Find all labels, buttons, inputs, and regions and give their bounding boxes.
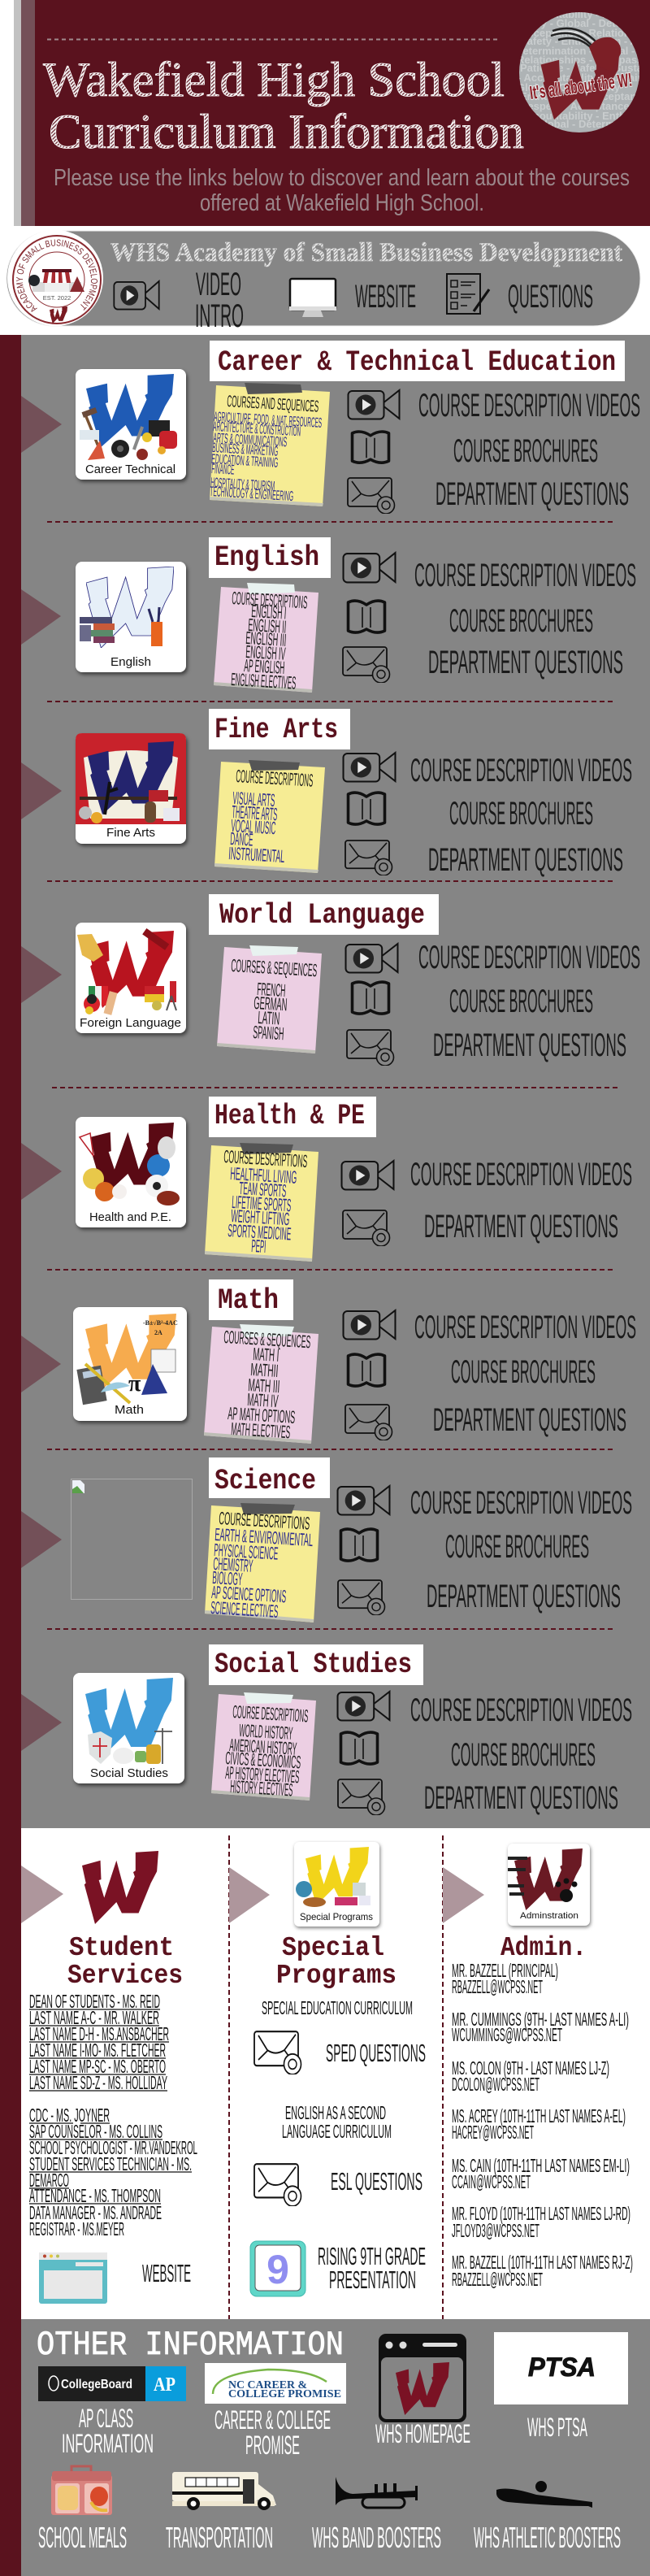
- sticky note: MATH IV: [247, 1389, 279, 1411]
- panel: support services background: [21, 1828, 650, 2319]
- icon: monitor: [289, 279, 336, 317]
- logo: college board ap: [38, 2366, 186, 2401]
- link: course description videos: [338, 1692, 632, 1728]
- sticky note: HOSPITALITY & TOURISM: [210, 475, 275, 494]
- arrow: [21, 396, 62, 453]
- sticky note: SCIENCE ELECTIVES: [210, 1597, 279, 1622]
- sticky note: AP SCIENCE OPTIONS: [211, 1582, 287, 1606]
- panel: math: COURSES & SEQUENCES: [223, 1327, 311, 1352]
- panel: social studies: [21, 1644, 632, 1816]
- panel: special programs: [229, 1842, 426, 2296]
- sticky note: DANCE: [230, 828, 254, 850]
- icon: health card: Health and P.E.: [89, 1210, 171, 1224]
- icon: rising 9th grade: 9: [266, 2247, 289, 2292]
- ap class information label: [62, 2404, 154, 2458]
- sticky note: [214, 583, 318, 693]
- icon: career technical card: [76, 369, 186, 480]
- arrow: [229, 1867, 270, 1923]
- arrow: [21, 1866, 63, 1923]
- icon: school logo: Global - Determination: [536, 118, 649, 130]
- sticky note: GERMAN: [254, 993, 288, 1014]
- panel: fine arts: COURSE DESCRIPTIONS: [236, 766, 314, 791]
- sticky note: FRENCH: [257, 979, 286, 1001]
- logo: ptsa: PTSA: [528, 2352, 596, 2382]
- icon: career technical card: Career Technical: [85, 463, 176, 476]
- link: course brochures: [353, 432, 598, 469]
- icon: school bus: [172, 2472, 276, 2510]
- sticky note: AP MATH OPTIONS: [228, 1403, 296, 1427]
- sticky note: TECHNOLOGY & ENGINEERING: [210, 484, 294, 504]
- arrow: [21, 762, 62, 819]
- title: [43, 53, 524, 159]
- logo: nc career and college promise: [205, 2363, 346, 2404]
- icon: video: [114, 281, 159, 310]
- logo: college board ap: AP: [154, 2374, 176, 2396]
- administrator contact list: [452, 1960, 633, 2290]
- icon: administration card: Adminstration: [520, 1911, 578, 1921]
- panel: world language: COURSES & SEQUENCES: [231, 955, 318, 980]
- text: SCHOOL PSYCHOLOGIST - MR.VANDEKROL: [29, 2137, 197, 2158]
- english as a second language curriculum: ENGLISH AS A SECOND: [285, 2102, 386, 2123]
- logo: ptsa: [494, 2332, 628, 2404]
- icon: foreign language card: [76, 923, 186, 1033]
- panel: fine arts: [21, 709, 632, 878]
- text: RISING 9TH GRADE: [318, 2242, 426, 2270]
- sticky note: FINANCE: [211, 461, 235, 478]
- english as a second language curriculum: [282, 2102, 392, 2142]
- icon: social studies card: [73, 1673, 184, 1783]
- sticky note: ENGLISH III: [245, 628, 287, 650]
- panel: special programs: LANGUAGE CURRICULUM: [282, 2121, 392, 2142]
- sticky note: MATHII: [250, 1359, 279, 1381]
- staff list: SAP COUNSELOR - MS. COLLINS: [29, 2121, 162, 2142]
- sticky note: EDUCATION & TRAINING: [211, 451, 279, 471]
- panel: world language: [21, 894, 640, 1066]
- sticky note: [204, 1324, 318, 1444]
- panel: career and technical education: [21, 341, 640, 514]
- icon: social studies card: Social Studies: [90, 1766, 168, 1780]
- heading: [209, 709, 350, 749]
- sticky note: ARTS & COMMUNICATIONS: [213, 430, 288, 450]
- text: WEBSITE: [142, 2259, 191, 2287]
- link: course brochures: [348, 793, 593, 832]
- icon: baseball and bat: [496, 2481, 592, 2508]
- icon: math card: 2A: [154, 1329, 162, 1336]
- bottom labels: TRANSPORTATION: [166, 2521, 273, 2554]
- icon: math card: [73, 1307, 187, 1421]
- title: Wakefield High School: [43, 53, 505, 106]
- sticky note: MATH ELECTIVES: [231, 1418, 291, 1442]
- heading: Services: [67, 1961, 183, 1991]
- heading: Special: [282, 1933, 384, 1963]
- staff list: LAST NAME MP-SC - MS. OBERTO: [29, 2056, 166, 2077]
- icon: english card: [76, 562, 186, 672]
- intro text: [54, 165, 630, 216]
- panel: student services: [21, 1851, 197, 2304]
- sticky note: [210, 383, 330, 506]
- panel: social studies: AP HISTORY ELECTIVES: [225, 1762, 300, 1787]
- icon: fine arts card: [76, 733, 186, 844]
- arrow: [21, 589, 61, 645]
- heading: [67, 1933, 183, 1991]
- panel: career and technical education: COURSES AND SEQUENCES: [227, 393, 319, 416]
- panel: social studies: AMERICAN HISTORY: [229, 1735, 297, 1759]
- panel: science: COURSE DESCRIPTIONS: [219, 1508, 310, 1534]
- sticky note: MATH III: [248, 1375, 280, 1397]
- staff list: DEMARCO: [29, 2170, 69, 2191]
- sticky note: INSTRUMENTAL: [228, 843, 285, 867]
- heading: [209, 1279, 293, 1320]
- sticky note: BIOLOGY: [212, 1567, 243, 1589]
- bottom labels: SCHOOL MEALS: [38, 2521, 127, 2554]
- sticky note: TEAM SPORTS: [239, 1178, 287, 1201]
- sticky note: VOCAL MUSIC: [231, 815, 276, 838]
- heading: [209, 1097, 376, 1137]
- panel: academy of small business development: [6, 231, 640, 334]
- link: course description videos: [344, 553, 636, 593]
- video intro label: [195, 267, 244, 334]
- icon: special programs card: [294, 1842, 379, 1927]
- staff list: DATA MANAGER - MS. ANDRADE: [29, 2202, 162, 2223]
- link: department questions: [345, 1402, 626, 1440]
- icon: school logo: [519, 12, 639, 132]
- panel: career and technical education: AGRICULTURE, FOOD, & NAT. RESOURCES: [214, 409, 323, 431]
- icon: broken image placeholder: [72, 1479, 192, 1600]
- sticky note: LATIN: [258, 1007, 280, 1029]
- heading: Admin.: [500, 1933, 587, 1963]
- heading: English: [214, 541, 319, 574]
- icon: lunchbox: [51, 2466, 112, 2515]
- panel: academy of small business development: VIDEO: [196, 267, 241, 302]
- link: department questions: [348, 476, 629, 514]
- panel: english: COURSE DESCRIPTIONS: [232, 588, 308, 613]
- icon: trumpet: [336, 2477, 418, 2508]
- staff list: LAST NAME I-MO- MS. FLETCHER: [29, 2040, 166, 2061]
- panel: career and technical education: ARCHITECTURE & CONSTRUCTION: [213, 419, 301, 439]
- arrow: [21, 1511, 62, 1568]
- link: department questions: [345, 841, 623, 878]
- icon: whs homepage browser: [379, 2334, 466, 2422]
- career and college promise label: PROMISE: [245, 2430, 300, 2460]
- sticky note: HEALTHFUL LIVING: [230, 1163, 297, 1188]
- panel: health and pe: COURSE DESCRIPTIONS: [223, 1146, 308, 1171]
- heading: Programs: [276, 1961, 396, 1991]
- panel: social studies: CIVICS & ECONOMICS: [225, 1748, 301, 1773]
- heading: OTHER INFORMATION: [37, 2326, 344, 2365]
- text: SPED QUESTIONS: [326, 2039, 426, 2067]
- staff list: LAST NAME D-H - MS.ANSBACHER: [29, 2023, 169, 2044]
- career and college promise label: [214, 2405, 331, 2460]
- link: department questions: [343, 645, 623, 683]
- sticky note: THEATRE ARTS: [232, 801, 278, 824]
- sticky note: WORLD HISTORY: [239, 1720, 293, 1744]
- sticky note: ENGLISH IV: [245, 641, 286, 664]
- icon: mail: [254, 2031, 301, 2074]
- link: department questions: [338, 1779, 618, 1816]
- sticky note: MATH I: [253, 1344, 280, 1366]
- sticky note: WEIGHT LIFTING: [231, 1205, 290, 1229]
- link: course brochures: [348, 1354, 596, 1390]
- icon: foreign language card: Foreign Language: [80, 1016, 181, 1030]
- heading: Student: [69, 1933, 174, 1963]
- icon: english card: English: [110, 655, 151, 669]
- sticky note: [205, 1503, 320, 1622]
- panel: science: EARTH & ENVIRONMENTAL: [214, 1524, 314, 1550]
- sticky note: ENGLISH I: [251, 601, 287, 623]
- sticky note: SPANISH: [253, 1022, 284, 1044]
- heading: WHS Academy of Small Business Development: [110, 238, 622, 267]
- sticky note: BUSINESS & MARKETING: [212, 440, 279, 459]
- link: department questions: [347, 1027, 626, 1066]
- icon: academy seal: [7, 231, 103, 326]
- logo: nc career and college promise: NC CAREER &: [228, 2379, 307, 2391]
- sticky note: SPORTS MEDICINE: [228, 1220, 292, 1245]
- panel: english: ENGLISH ELECTIVES: [231, 669, 297, 693]
- sticky note: [205, 1143, 318, 1262]
- panel: social studies: HISTORY ELECTIVES: [230, 1776, 293, 1801]
- panel: academy of small business development: WEBSITE: [355, 279, 416, 315]
- icon: academy seal: ACADEMY OF SMALL BUSINESS DEVELOPMENT: [16, 239, 98, 312]
- panel: health and pe: [21, 1097, 632, 1262]
- heading: World Language: [219, 899, 425, 932]
- sticky note: PHYSICAL SCIENCE: [214, 1540, 279, 1564]
- icon: special programs card: Special Programs: [300, 1911, 373, 1922]
- icon: mail: [254, 2164, 301, 2206]
- staff list: REGISTRAR - MS.MEYER: [29, 2218, 124, 2239]
- icon: website window: [39, 2252, 107, 2304]
- icon: academy seal: EST. 2022: [43, 294, 71, 302]
- icon: math card: π: [128, 1371, 141, 1397]
- panel: science: [21, 1457, 632, 1622]
- icon: health card: [76, 1117, 186, 1227]
- text: STUDENT SERVICES TECHNICIAN - MS.: [29, 2153, 192, 2174]
- heading: [276, 1933, 396, 1991]
- link: course brochures: [341, 1732, 596, 1773]
- ap class information label: INFORMATION: [62, 2429, 154, 2458]
- bottom labels: WHS BAND BOOSTERS: [312, 2521, 441, 2554]
- rising 9th grade presentation: PRESENTATION: [329, 2265, 416, 2294]
- link: department questions: [343, 1209, 618, 1246]
- heading: Math: [218, 1284, 279, 1317]
- panel: academy of small business development: INTRO: [195, 298, 244, 334]
- panel: social studies: COURSE DESCRIPTIONS: [232, 1701, 309, 1727]
- staff list: ATTENDANCE - MS. THOMPSON: [29, 2185, 161, 2206]
- link: course brochures: [341, 1529, 589, 1565]
- logo: college board ap: CollegeBoard: [61, 2378, 132, 2391]
- heading: Social Studies: [214, 1649, 412, 1681]
- link: course brochures: [353, 982, 593, 1019]
- panel: other information: CAREER & COLLEGE: [214, 2405, 331, 2435]
- sticky note: [217, 945, 322, 1053]
- panel: other information: [21, 2319, 650, 2576]
- staff list: [29, 1991, 197, 2239]
- sticky note: ENGLISH II: [248, 615, 287, 637]
- icon: math card: Math: [115, 1403, 144, 1417]
- sticky note: [211, 1692, 316, 1801]
- icon: rising 9th grade: [250, 2241, 306, 2296]
- arrow: [443, 1867, 484, 1923]
- sticky note: CHEMISTRY: [213, 1553, 254, 1576]
- link: course brochures: [348, 601, 593, 639]
- staff list: CDC - MS. JOYNER: [29, 2105, 110, 2126]
- staff list: DEAN OF STUDENTS - MS. REID: [29, 1991, 160, 2012]
- sticky note: AP ENGLISH: [244, 655, 285, 678]
- arrow: [21, 1694, 62, 1751]
- heading: Health & PE: [214, 1100, 365, 1132]
- ap class information label: AP CLASS: [79, 2404, 133, 2433]
- logo: nc career and college promise: COLLEGE PROMISE: [228, 2388, 341, 2400]
- panel: other information: WHS HOMEPAGE: [375, 2419, 470, 2448]
- panel: english: [21, 537, 636, 693]
- bottom labels: [38, 2521, 621, 2554]
- staff list: LAST NAME A-C - MR. WALKER: [29, 2007, 159, 2028]
- heading: Fine Arts: [214, 714, 338, 746]
- panel: administration: [443, 1844, 633, 2290]
- link: department questions: [338, 1579, 621, 1615]
- icon: math card: -B±√B²-4AC: [143, 1319, 178, 1327]
- intro text: offered at Wakefield High School.: [200, 190, 484, 216]
- heading: Science: [214, 1465, 316, 1497]
- panel: math: [21, 1279, 636, 1444]
- staff list: LAST NAME SD-Z - MS. HOLLIDAY: [29, 2072, 167, 2093]
- icon: school logo: Global - Countability: [517, 81, 621, 93]
- rising 9th grade presentation: [318, 2242, 426, 2294]
- icon: maroon w: [82, 1851, 158, 1924]
- icon: checklist: [447, 274, 489, 314]
- icon: administration card: [508, 1844, 590, 1926]
- sticky note: [214, 760, 325, 873]
- sticky note: LIFETIME SPORTS: [232, 1192, 292, 1215]
- header banner: [14, 0, 650, 226]
- administrator contact list: CCAIN@WCPSS.NET: [452, 2171, 531, 2192]
- arrow: [21, 946, 62, 1003]
- text: ESL QUESTIONS: [331, 2167, 422, 2196]
- title: Curriculum Information: [49, 105, 524, 159]
- panel: special programs: SPECIAL EDUCATION CURRICULUM: [262, 1997, 413, 2018]
- sticky note: PEPI: [251, 1236, 266, 1257]
- sticky note: VISUAL ARTS: [232, 788, 275, 810]
- icon: fine arts card: Fine Arts: [106, 826, 155, 840]
- arrow: [21, 1336, 61, 1392]
- arrow: [21, 1143, 62, 1200]
